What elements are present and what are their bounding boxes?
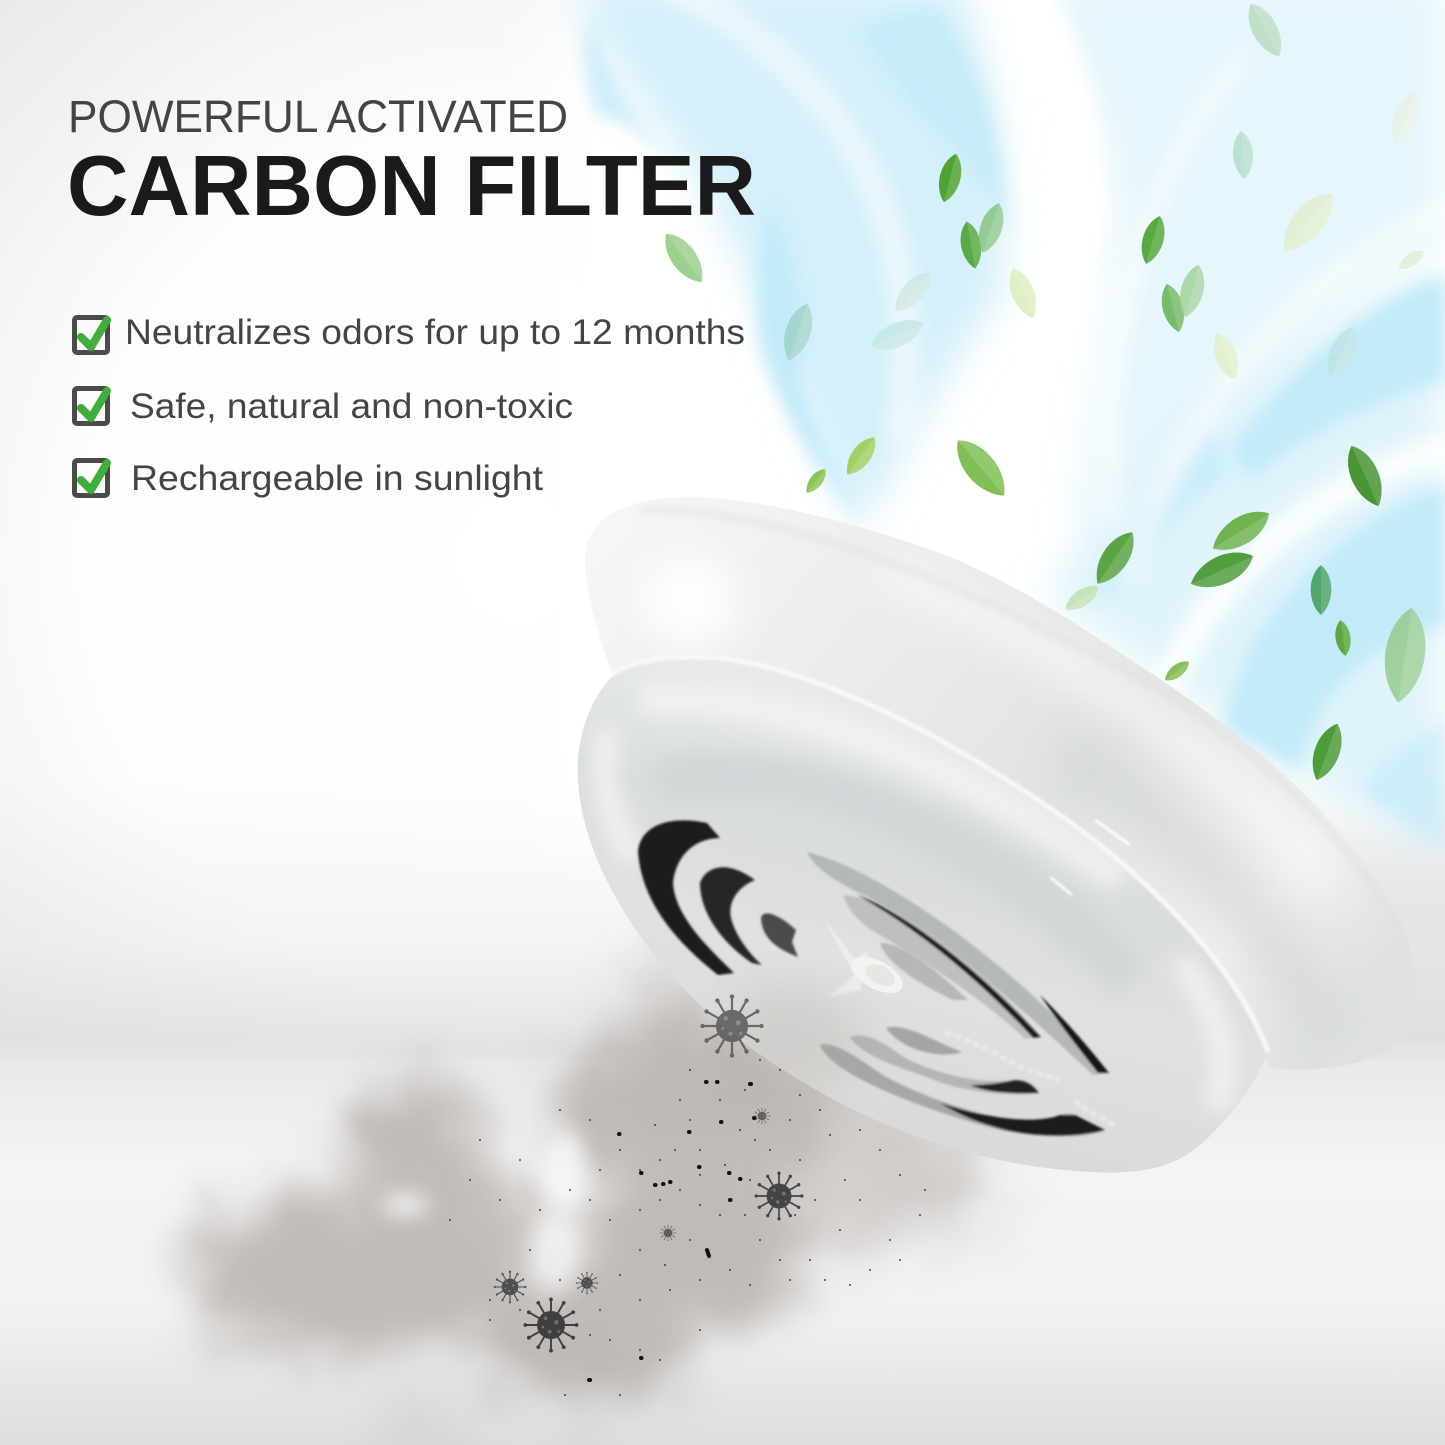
leaf pair: upper right xyxy=(1157,262,1209,335)
leaf: ghost top right xyxy=(1385,88,1425,148)
virus: bottom right small xyxy=(576,1272,598,1294)
leaf: pale yellow lower xyxy=(1208,329,1244,383)
hub star xyxy=(823,918,868,997)
device: main body xyxy=(578,655,1268,1173)
slot: second arc xyxy=(843,895,1041,1039)
virus: bottom large xyxy=(523,1297,579,1353)
title: top line: POWERFUL ACTIVATED xyxy=(68,91,568,142)
device: seam ridge xyxy=(612,657,1268,1052)
leaf: small left xyxy=(802,465,830,497)
leaf: upper centre xyxy=(1136,213,1170,267)
leaf pair: upper left xyxy=(957,200,1009,270)
slot: inner arc xyxy=(880,943,968,1000)
product: carbon filter device xyxy=(578,497,1416,1173)
dust particles xyxy=(450,1060,925,1395)
virus: large on device xyxy=(700,994,764,1058)
leaf: faded small xyxy=(1395,246,1427,274)
leaf: faded stem xyxy=(1231,130,1255,180)
device: vented face xyxy=(638,820,1115,1136)
leaf: pale blue xyxy=(1320,322,1364,382)
leaf: pale blue-green xyxy=(888,266,938,318)
leaf: bright green xyxy=(934,151,966,205)
larger dust specks xyxy=(589,1082,754,1380)
dust gaps xyxy=(381,1130,587,1291)
leaf: long faded right xyxy=(1379,605,1431,705)
dust cloud xyxy=(190,930,1000,1445)
leaf: bottom right xyxy=(1305,720,1349,784)
item 1: Neutralizes odors for up to 12 months xyxy=(125,313,745,352)
virus: bottom left xyxy=(494,1271,526,1303)
leaf: pale near headline xyxy=(656,226,712,290)
leaf: centre large xyxy=(1087,525,1143,591)
air flow: blue swirl xyxy=(560,0,1445,860)
leaf: dark green right xyxy=(1339,440,1391,512)
leaf: faded long xyxy=(1273,184,1343,260)
slot: outer arc xyxy=(807,852,1109,1075)
leaf: small second xyxy=(840,432,882,480)
leaf: pale horizontal xyxy=(866,312,928,358)
dust drifting over device xyxy=(720,985,860,1095)
slot: lower short xyxy=(886,1027,962,1054)
item 3: Rechargeable in sunlight xyxy=(131,459,543,498)
virus: tiny upper xyxy=(754,1108,770,1124)
leaf: pale tail xyxy=(1061,580,1103,616)
hub cap xyxy=(846,949,908,1001)
item 2: Safe, natural and non-toxic xyxy=(130,387,573,426)
virus: tiny middle xyxy=(660,1225,676,1241)
leaf: pale yellow xyxy=(1003,264,1043,322)
leaf: small narrow xyxy=(1333,619,1353,657)
virus particles xyxy=(494,994,803,1353)
leaf: blue-green xyxy=(777,300,819,364)
device: flange rim xyxy=(585,497,1416,1070)
title xyxy=(67,91,756,234)
device: groove highlights xyxy=(1050,820,1130,895)
title: main line: CARBON FILTER xyxy=(67,139,756,234)
feature checklist xyxy=(74,313,745,498)
leaf: fading xyxy=(1206,502,1276,560)
leaf: narrow xyxy=(1311,565,1331,615)
embossed brand mark xyxy=(945,1033,1115,1125)
leaf: large light green xyxy=(946,431,1016,505)
leaf: by the rim xyxy=(1161,657,1193,685)
leaf: faded top right xyxy=(1240,0,1290,62)
slot: lower middle xyxy=(850,1035,1039,1094)
leaf: horizontal green xyxy=(1185,543,1259,597)
device: side shading xyxy=(604,699,1224,1110)
slot: lower outer xyxy=(820,1044,1105,1136)
floating green leaves xyxy=(656,0,1431,784)
virus: right xyxy=(755,1172,803,1220)
